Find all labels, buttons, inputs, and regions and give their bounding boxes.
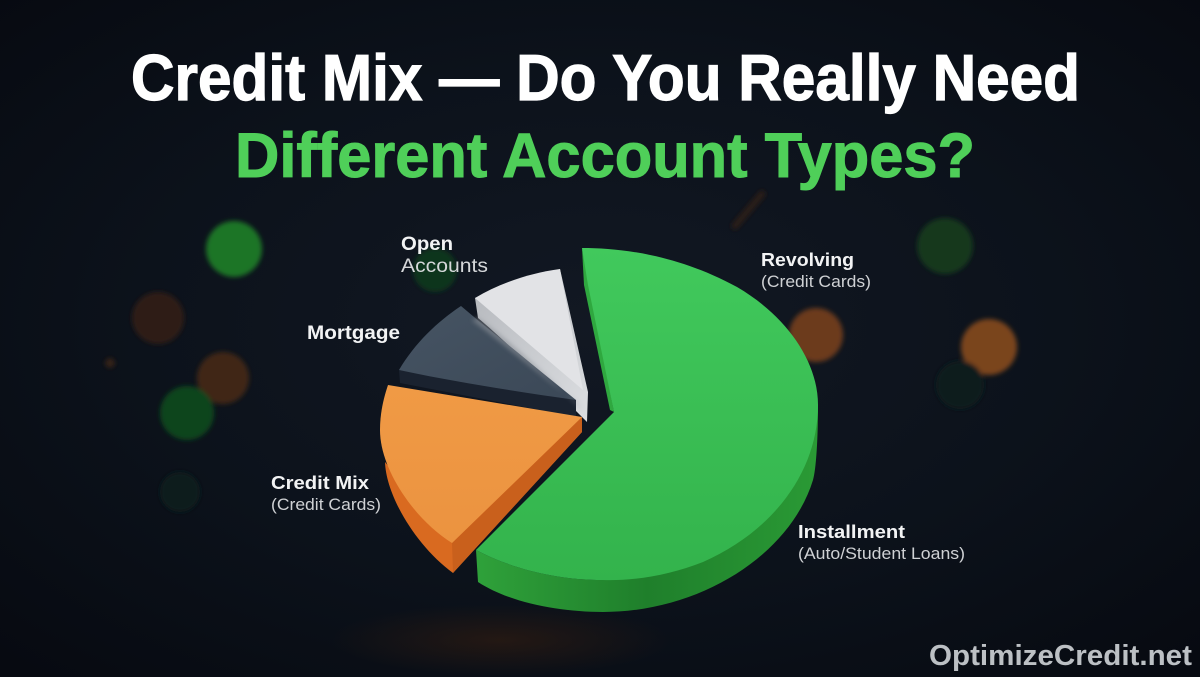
slice: mortgage bbox=[399, 306, 583, 417]
slice: revolving and installment bbox=[476, 248, 818, 612]
label: revolving: Revolving bbox=[761, 249, 854, 270]
label: installment bbox=[798, 521, 965, 563]
label: mortgage: Mortgage bbox=[307, 323, 400, 344]
title line 2: Different Account Types? bbox=[235, 121, 975, 191]
label: credit mix: (Credit Cards) bbox=[271, 495, 381, 514]
green inner edge bbox=[582, 248, 614, 412]
green side wall bbox=[476, 405, 818, 612]
slice: open accounts bbox=[475, 269, 588, 422]
slice: credit mix bbox=[380, 385, 582, 573]
green top face bbox=[476, 248, 818, 580]
label: installment: Installment bbox=[798, 521, 905, 542]
title bbox=[131, 41, 1080, 191]
label: revolving bbox=[761, 249, 871, 291]
title line 1: Credit Mix — Do You Really Need bbox=[131, 41, 1080, 114]
label: credit mix bbox=[271, 472, 381, 514]
label: installment: (Auto/Student Loans) bbox=[798, 544, 965, 563]
label: credit mix: Credit Mix bbox=[271, 472, 370, 493]
label: open accounts bbox=[401, 234, 488, 277]
label: open accounts: Open bbox=[401, 234, 453, 255]
label: revolving: (Credit Cards) bbox=[761, 272, 871, 291]
label: open accounts: Accounts bbox=[401, 255, 488, 277]
pie chart bbox=[380, 248, 818, 612]
watermark: OptimizeCredit.net bbox=[929, 640, 1192, 672]
pie shadow glow bbox=[330, 604, 670, 676]
bokeh lights bbox=[105, 194, 1017, 512]
